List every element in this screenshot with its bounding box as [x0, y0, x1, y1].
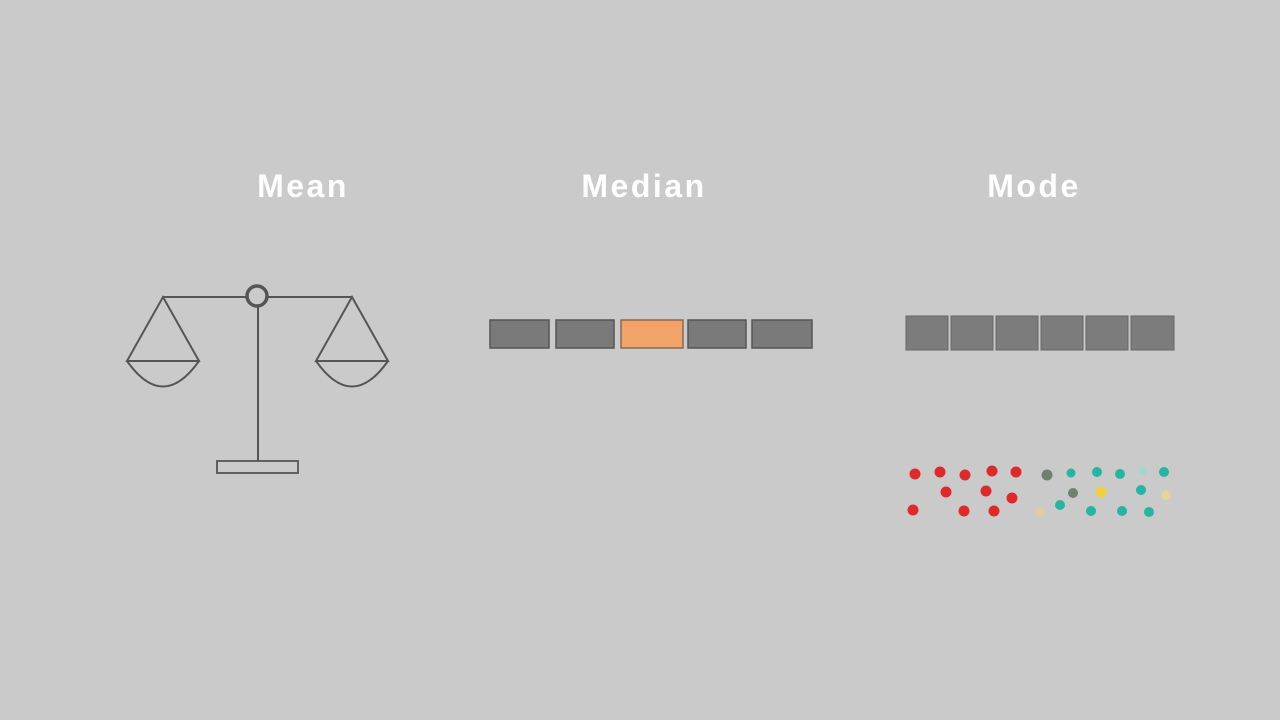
icon: balance scale — [127, 286, 388, 473]
title: Mode: Mode — [987, 168, 1081, 204]
chart: median boxes — [490, 320, 812, 348]
chart: mode boxes — [906, 316, 1174, 350]
title: Median: Median — [581, 168, 707, 204]
chart: mode dots — [908, 466, 1171, 517]
title: Mean: Mean — [257, 168, 349, 204]
